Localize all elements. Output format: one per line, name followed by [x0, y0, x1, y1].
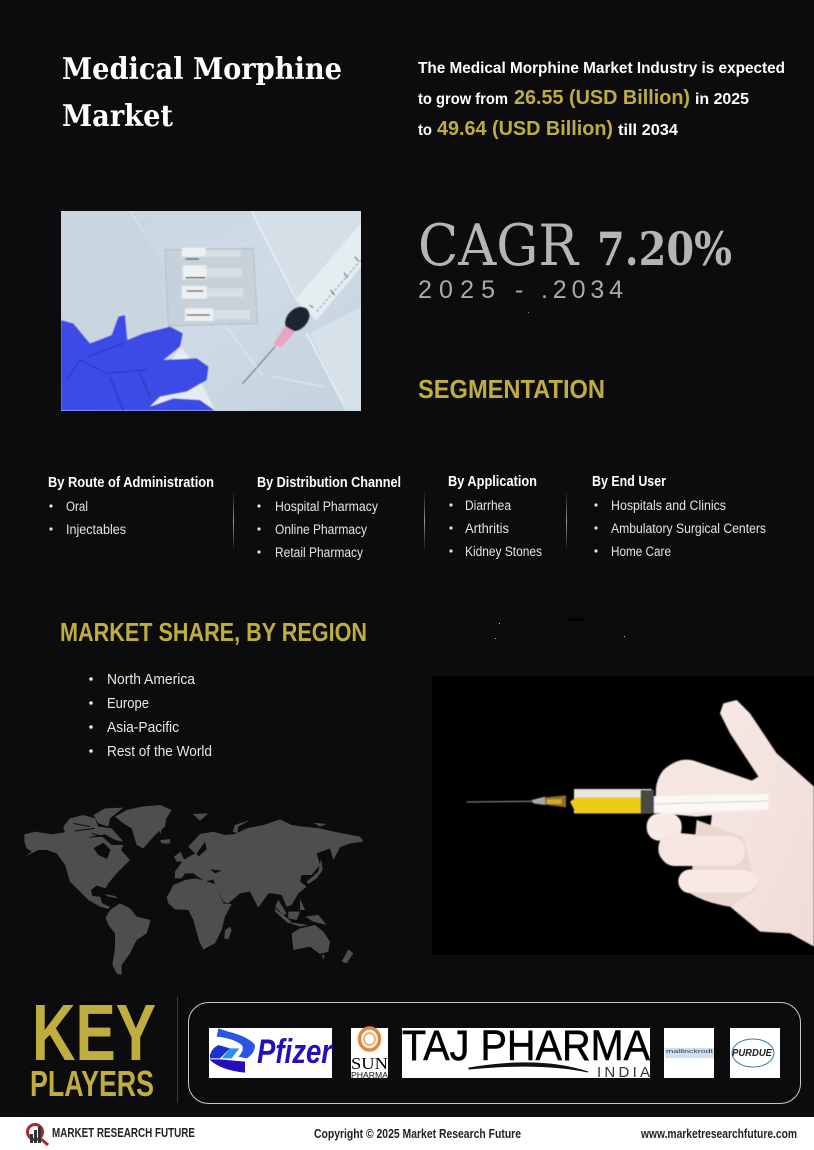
market share heading: MARKET SHARE, BY REGION	[60, 617, 367, 647]
CAGR figure: .2034	[541, 276, 623, 304]
region list: Rest of the World	[107, 743, 212, 760]
syringe	[242, 223, 361, 384]
logo: Pfizer	[209, 1028, 333, 1078]
copyright: Copyright © 2025 Market Research Future	[314, 1127, 521, 1141]
CAGR figure: 2025	[418, 276, 495, 304]
title: Market	[62, 99, 173, 134]
logo: Mallinckrodt	[664, 1028, 714, 1078]
region list: Asia-Pacific	[107, 719, 179, 736]
key players label: PLAYERS	[30, 1063, 154, 1104]
segment column: by end user: Ambulatory Surgical Centers	[611, 521, 766, 536]
segment column: by application: By Application	[448, 474, 537, 490]
CAGR figure: -	[515, 276, 523, 304]
segment column: by application: Diarrhea	[465, 498, 511, 513]
title	[62, 52, 342, 134]
world map	[24, 805, 363, 975]
segment column: by route of administration: Injectables	[66, 522, 126, 537]
segmentation heading: SEGMENTATION	[418, 374, 605, 404]
logo: Purdue	[730, 1028, 780, 1078]
segment column: by distribution channel: Online Pharmacy	[275, 522, 367, 537]
segment column: by distribution channel	[257, 475, 401, 560]
ampoule blister pack	[165, 248, 257, 326]
segment column: by end user: By End User	[592, 474, 666, 490]
CAGR figure: 7.20%	[597, 222, 732, 276]
market forecast text: The Medical Morphine Market Industry is expected	[418, 60, 785, 77]
CAGR figure: CAGR	[418, 213, 580, 279]
syringe	[467, 789, 768, 813]
key players label: KEY	[32, 988, 156, 1077]
logo: Taj Pharma India: TAJ PHARMA	[402, 1022, 650, 1070]
region list	[89, 671, 212, 760]
segment column: by route of administration: By Route of Administration	[48, 475, 214, 491]
logo: Purdue: PURDUE	[732, 1047, 773, 1059]
logo: Mallinckrodt: mallinckrodt	[666, 1049, 714, 1055]
segment column: by route of administration	[48, 475, 214, 537]
segment column: by end user: Home Care	[611, 544, 671, 559]
market forecast text: to	[418, 122, 432, 139]
segment column: by end user	[592, 474, 766, 559]
segment column: by application: Arthritis	[465, 521, 509, 536]
market forecast text: to grow from	[418, 91, 508, 108]
map: Americas	[24, 805, 172, 975]
glove	[647, 700, 814, 947]
key players label	[30, 988, 156, 1104]
icon: market research future logo	[28, 1124, 48, 1145]
logo: Pfizer: Pfizer	[257, 1033, 333, 1071]
market forecast text: 26.55 (USD Billion)	[514, 87, 690, 109]
market forecast text: in 2025	[695, 91, 749, 108]
logo: Sun Pharma: SUN	[351, 1054, 388, 1073]
logo: Sun Pharma	[351, 1028, 389, 1080]
region list: Europe	[107, 695, 149, 712]
region list: North America	[107, 671, 196, 688]
segment column: by distribution channel: By Distribution Channel	[257, 475, 401, 491]
logo: Taj Pharma India: INDIA	[597, 1064, 650, 1081]
segment column: by end user: Hospitals and Clinics	[611, 498, 726, 513]
market forecast text	[418, 60, 785, 140]
title: Medical Morphine	[62, 52, 342, 87]
market forecast text: 49.64 (USD Billion)	[437, 118, 613, 140]
segment column: by application: Kidney Stones	[465, 544, 542, 559]
photo: gloved hand holding syringe	[432, 676, 814, 955]
segment column: by distribution channel: Hospital Pharmacy	[275, 499, 378, 514]
segment column: by distribution channel: Retail Pharmacy	[275, 545, 363, 560]
key players panel	[188, 1002, 800, 1104]
photo: ampoules, syringe and blue glove	[61, 211, 361, 411]
market forecast text: till 2034	[618, 122, 678, 139]
segment column: by application	[448, 474, 542, 559]
CAGR figure	[418, 213, 732, 304]
footer bar	[0, 1117, 814, 1150]
segment column: by route of administration: Oral	[66, 499, 88, 514]
logo: Sun Pharma: PHARMA	[351, 1071, 389, 1080]
footer bar: MARKET RESEARCH FUTURE	[52, 1126, 195, 1140]
blue glove	[61, 315, 215, 411]
map: Europe, Asia, Africa and Oceania	[160, 810, 363, 963]
